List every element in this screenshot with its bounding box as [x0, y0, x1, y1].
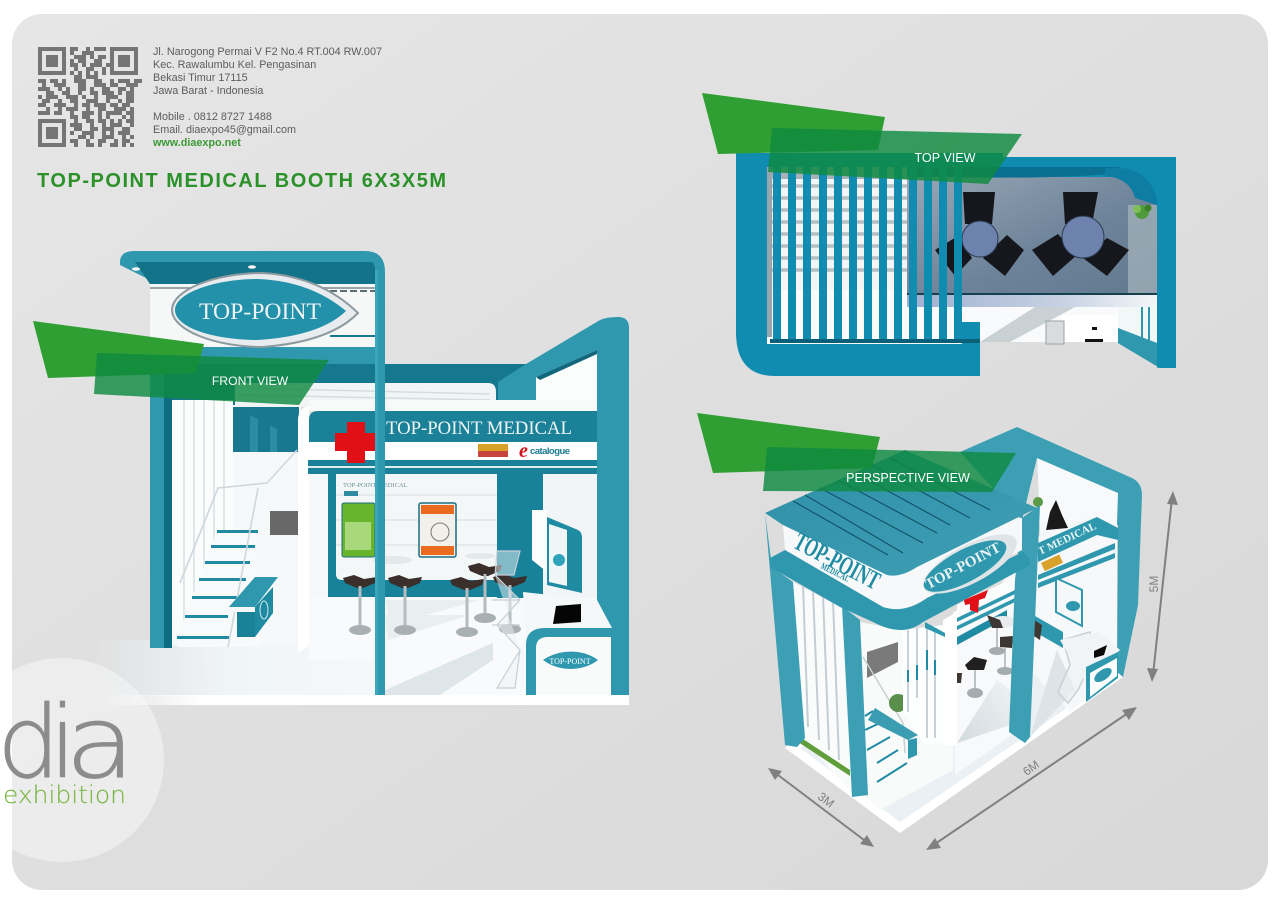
- beam lower hanger: [925, 622, 945, 637]
- stools: [957, 615, 1042, 698]
- mini desk: [868, 708, 918, 759]
- white slat bay: [793, 582, 853, 795]
- fascia white curve: [783, 518, 1022, 612]
- dimension arrow 5M: 5M: [1147, 576, 1161, 592]
- staircase: [177, 450, 298, 647]
- fascia sign: [308, 400, 597, 474]
- contact details: Bekasi Timur 17115: [153, 72, 248, 84]
- partner logos: catalogue: [530, 446, 570, 457]
- panel: top view booth: [702, 93, 1176, 376]
- contact details: Email. diaexpo45@gmail.com: [153, 124, 296, 136]
- fascia lettering: TOP-POINT: [789, 527, 885, 595]
- white box behind screen: [532, 510, 547, 572]
- black chairs on mezzanine: [1046, 500, 1068, 530]
- white front column: [943, 612, 957, 745]
- green planter: [798, 737, 850, 776]
- right wall with diagonal: [233, 317, 629, 695]
- top view ribbon: [702, 93, 1022, 184]
- dimension arrow 5M: [1147, 491, 1178, 682]
- top band shadow: [908, 167, 1120, 178]
- red cross: [335, 422, 376, 463]
- brochure rack: [492, 551, 520, 688]
- perspective label: PERSPECTIVE VIEW: [846, 471, 970, 485]
- counter: [523, 592, 612, 695]
- contact details: www.diaexpo.net: [152, 137, 241, 149]
- white vertical slats near stairs: [903, 625, 943, 745]
- perspective eye logo: TOP-POINT: [923, 540, 1004, 593]
- stair side wall grey panel: [867, 642, 898, 678]
- side wall poster: [1056, 578, 1082, 626]
- rear interior walls: [171, 395, 599, 695]
- dimension arrow 3M: 3M: [815, 789, 837, 811]
- logo: dia exhibition: exhibition: [3, 781, 126, 809]
- left interior: [767, 167, 962, 344]
- QR code: [38, 47, 142, 147]
- fascia lettering: [789, 527, 885, 595]
- right wing panel: [1118, 307, 1160, 368]
- orange poster: [419, 503, 456, 557]
- grey-blue room floor: [907, 177, 1157, 293]
- small reception desk: [228, 577, 278, 637]
- back wall and right frame: [960, 427, 1142, 712]
- plant near stairs: [889, 694, 909, 712]
- magazine rack: [1058, 632, 1095, 703]
- ceiling slats: [770, 167, 980, 343]
- fascia company name: TOP-POINT MEDICAL: [386, 418, 572, 439]
- main eye logo: [172, 273, 358, 347]
- logo wordmark: TOP-POINT: [199, 299, 321, 324]
- white side column: [298, 406, 309, 653]
- dimension arrow 6M: [926, 707, 1137, 850]
- partner logos: e: [519, 440, 528, 462]
- logo backdrop circle: [0, 658, 164, 862]
- dimension arrow 6M: 6M: [1020, 757, 1042, 779]
- header beam and left column: [150, 347, 375, 648]
- counter monitor: [553, 604, 581, 624]
- title: TOP-POINT MEDICAL BOOTH 6X3X5M: [37, 170, 446, 192]
- side fascia lettering: T MEDICAL: [1036, 520, 1098, 558]
- stools: [343, 563, 527, 637]
- perspective eye logo: [915, 523, 1025, 605]
- floor: [95, 640, 629, 705]
- roof: [765, 450, 1037, 576]
- table tops: [372, 553, 495, 564]
- stair rail: [863, 657, 905, 753]
- contact details: [152, 46, 382, 149]
- wall lettering: TOP-POINT MEDICAL: [343, 482, 408, 489]
- logo: dia exhibition: a: [65, 685, 135, 801]
- upper white sign panel: [150, 284, 375, 347]
- green poster: [342, 503, 375, 557]
- main front post and canopy: [120, 251, 385, 695]
- dimension arrow 3M: [768, 768, 874, 847]
- contact details: Jawa Barat - Indonesia: [153, 85, 263, 97]
- logo: dia exhibition: [0, 684, 135, 809]
- front view label: FRONT VIEW: [212, 374, 289, 388]
- fascia lettering: MEDICAL: [819, 562, 851, 585]
- front view ribbon: [33, 321, 329, 405]
- counter logo: TOP-POINT: [549, 657, 591, 666]
- panel: front view booth: [33, 251, 629, 705]
- white vertical slats: [171, 400, 233, 640]
- partner logos: [478, 440, 570, 462]
- perspective ribbon: [697, 413, 1016, 492]
- wall screen: [547, 517, 582, 593]
- red cross: [964, 590, 988, 613]
- interior sign and lower teal strip: [957, 577, 1063, 648]
- right wall end: [1105, 168, 1157, 205]
- contact details: Kec. Rawalumbu Kel. Pengasinan: [153, 59, 316, 71]
- rear white ceiling: [235, 383, 496, 407]
- plant: [1033, 497, 1043, 507]
- panel: perspective view booth: [697, 413, 1178, 850]
- floor platform: [785, 640, 1123, 833]
- mezzanine edge strip: [907, 293, 1157, 307]
- contact details: Jl. Narogong Permai V F2 No.4 RT.004 RW.007: [153, 46, 382, 58]
- lower beam: [770, 550, 1030, 630]
- white floor: [962, 307, 1118, 342]
- side fascia: [1036, 517, 1118, 588]
- outer teal frame: [736, 153, 1176, 376]
- perspective counter: [1060, 632, 1120, 702]
- lower front interior: [860, 590, 1075, 810]
- potted plant: [1133, 204, 1152, 219]
- contact details: Mobile . 0812 8727 1488: [153, 111, 272, 123]
- counter seen from above: [1046, 315, 1118, 344]
- top view label: TOP VIEW: [914, 151, 976, 165]
- stair treads: [865, 711, 907, 782]
- columns: [765, 505, 1040, 797]
- wall lettering: [343, 482, 408, 496]
- chairs and round tables: [935, 192, 1129, 276]
